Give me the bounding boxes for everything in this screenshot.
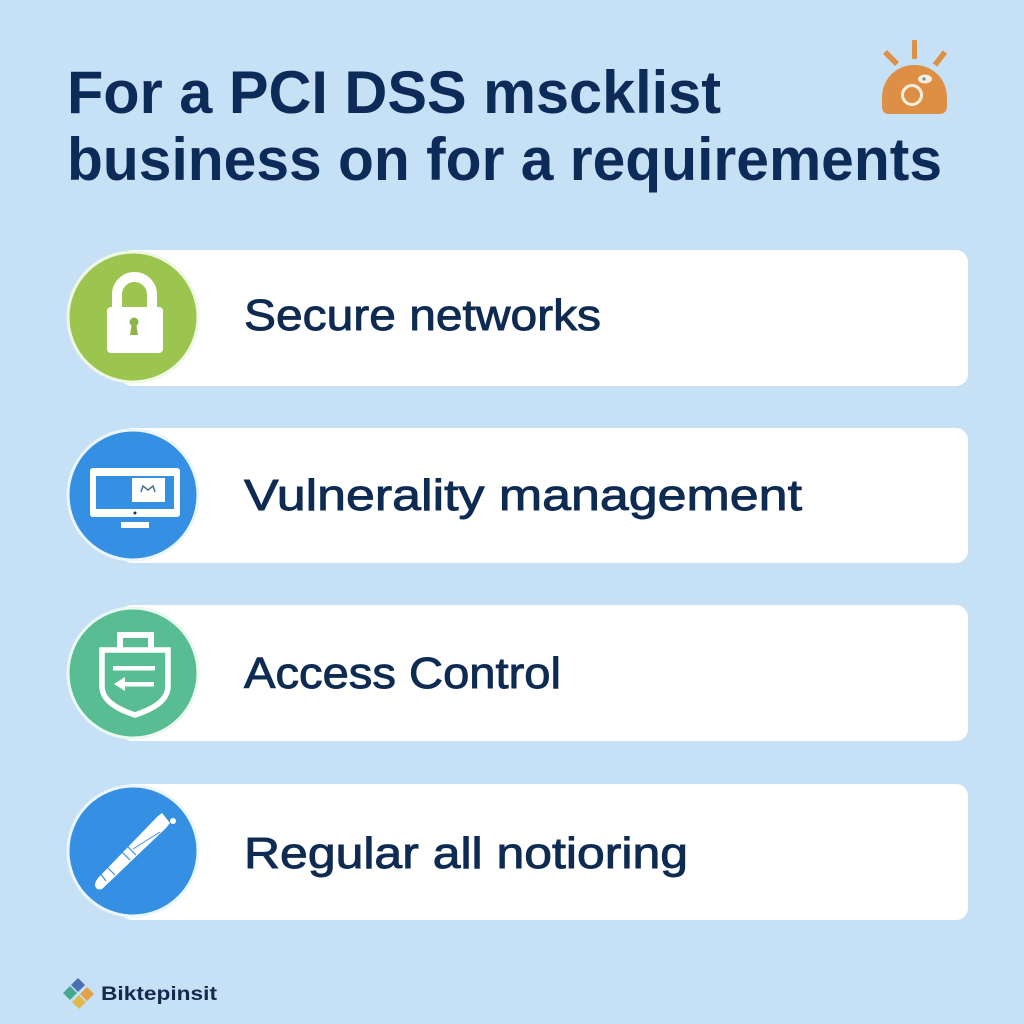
icon: pen bbox=[68, 786, 198, 916]
label: Access Control bbox=[244, 649, 561, 698]
panel: access control bbox=[68, 605, 968, 741]
title: business on for a requirements bbox=[67, 126, 942, 193]
icon: shield bbox=[68, 608, 198, 738]
title bbox=[67, 59, 942, 193]
icon: orange dome with rays bbox=[882, 40, 947, 114]
panel: regular monitoring bbox=[68, 784, 968, 920]
panel: secure networks bbox=[68, 250, 968, 386]
footer logo bbox=[63, 978, 218, 1009]
label: Vulnerality management bbox=[244, 471, 802, 520]
icon: monitor with mail bbox=[68, 430, 198, 560]
label: Secure networks bbox=[244, 291, 601, 340]
label: Regular all notioring bbox=[244, 829, 688, 878]
title: For a PCI DSS mscklist bbox=[67, 59, 721, 126]
icon: padlock bbox=[68, 252, 198, 382]
panel: vulnerability management bbox=[68, 428, 968, 563]
footer brand name: Biktepinsit bbox=[101, 984, 218, 1005]
